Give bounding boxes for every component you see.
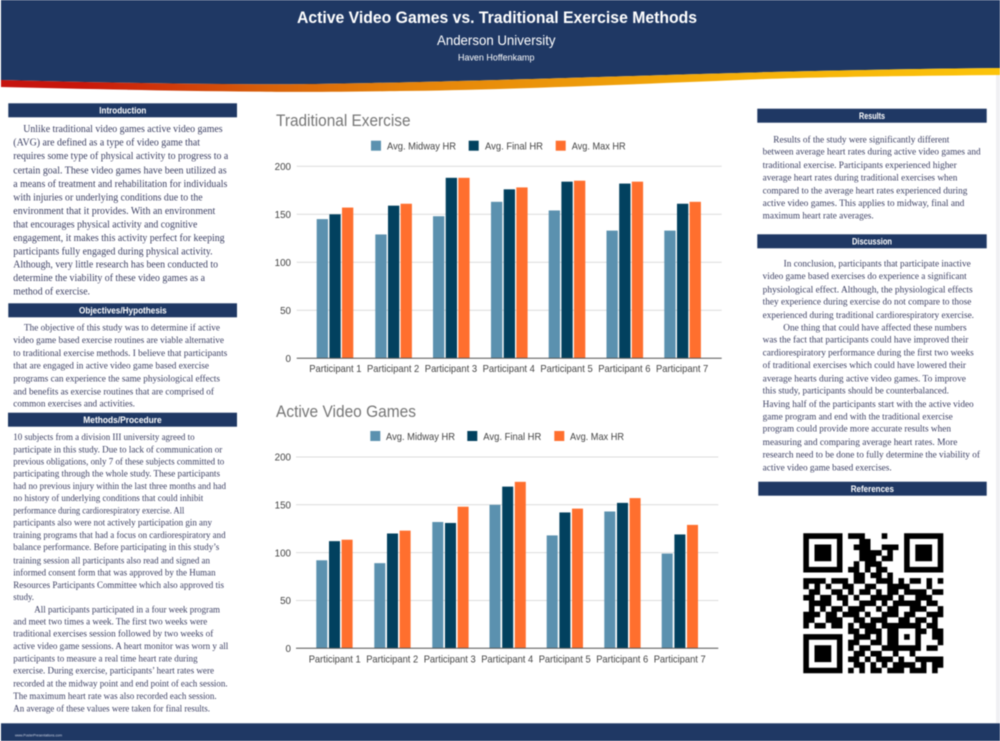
x axis labels: Participant 4 — [481, 653, 533, 665]
text: methods body: traditional exercises session followed by two weeks of — [13, 629, 213, 639]
text: methods body — [13, 432, 229, 713]
text: introduction body: (AVG) are defined as a type of video game that — [13, 138, 200, 149]
x axis labels: Participant 6 — [598, 363, 651, 375]
text: discussion body: video game based exercises do experience a significant — [763, 271, 967, 281]
panel: results — [757, 109, 987, 220]
heading: methods — [8, 413, 237, 427]
y axis labels — [275, 162, 292, 365]
text: results body: maximum heart rate averages. — [763, 210, 874, 220]
heading: introduction: Introduction — [99, 106, 146, 116]
wave stripe — [1, 68, 1000, 92]
bars — [316, 482, 698, 648]
text: discussion body: In conclusion, participants that participate inactive — [784, 259, 971, 269]
x axis labels: Participant 5 — [539, 653, 591, 665]
y axis labels: 200 — [275, 162, 292, 173]
heading: discussion: Discussion — [852, 236, 892, 246]
chart title: Active Video Games — [276, 403, 416, 421]
text: methods body: had no previous injury within the last three months and had — [13, 481, 226, 491]
text: methods body: study. — [13, 592, 34, 602]
panel: methods — [8, 413, 237, 713]
text: introduction body: requires some type of physical activity to progress to a — [13, 151, 229, 162]
heading: introduction — [8, 103, 237, 117]
text: discussion body: average hearts during active video games. To improve — [763, 373, 966, 383]
legend: Avg. Max HR — [570, 431, 624, 443]
y axis labels: 100 — [275, 258, 292, 269]
panel: discussion — [757, 234, 987, 473]
text: objectives body: common exercises and activities. — [13, 399, 135, 409]
text: discussion body: program could provide more accurate results when — [763, 424, 952, 434]
y axis labels: 200 — [275, 453, 292, 464]
text: objectives body: The objective of this study was to determine if active — [24, 323, 220, 333]
text: introduction body: determine the viability of these video games as a — [13, 273, 206, 284]
y axis labels — [275, 453, 292, 655]
x axis labels: Participant 2 — [367, 363, 419, 375]
university: Anderson University — [437, 32, 556, 48]
x axis labels: Participant 4 — [483, 363, 535, 375]
text: objectives body: and benefits as exercise routines that are comprised of — [13, 386, 214, 396]
heading: objectives: Objectives/Hypothesis — [79, 306, 167, 316]
panel: objectives — [8, 303, 237, 409]
y axis labels: 0 — [286, 354, 292, 365]
text: discussion body: One thing that could have affected these numbers — [783, 322, 967, 332]
text: methods body: participants also were not actively participation gin any — [13, 518, 212, 528]
text: results body: Results of the study were significantly different — [773, 134, 950, 144]
x axis labels: Participant 1 — [309, 653, 361, 665]
text: introduction body — [13, 124, 229, 298]
header banner — [1, 0, 1000, 92]
text: objectives body: to traditional exercise methods. I believe that participants — [13, 348, 228, 358]
footer text: www.PosterPresentations.com — [15, 732, 63, 738]
text: introduction body: Unlike traditional video games active video games — [23, 124, 223, 135]
text: methods body: and meet two times a week. The first two weeks were — [13, 617, 207, 627]
text: methods body: no history of underlying conditions that could inhibit — [13, 493, 204, 503]
text: methods body: performance during cardiorespiratory exercise. All — [13, 505, 185, 515]
y axis labels: 100 — [275, 548, 292, 559]
x axis labels: Participant 6 — [596, 653, 648, 665]
text: discussion body: active video game based exercises. — [763, 463, 892, 473]
text: discussion body: experienced during traditional cardiorespiratory exercise. — [763, 310, 974, 320]
panel: references — [758, 482, 987, 673]
text: results body: traditional exercise. Participants experienced higher — [763, 160, 957, 170]
text: introduction body: with injuries or underlying conditions due to the — [13, 193, 203, 204]
legend: Avg. Midway HR — [386, 431, 455, 443]
text: discussion body: cardiorespiratory performance during the first two weeks — [763, 348, 974, 358]
text: methods body: previous obligations, only 7 of these subjects committed to — [13, 457, 225, 467]
text: discussion body: research need to be done to fully determine the viability of — [763, 449, 980, 459]
text: results body: active video games. This applies to midway, final and — [763, 198, 965, 208]
text: introduction body: participants fully engaged during physical activity. — [13, 246, 213, 257]
text: methods body: recorded at the midway point and end point of each session. — [13, 679, 228, 689]
text: objectives body: programs can experience the same physiological effects — [13, 374, 220, 384]
heading: references: References — [851, 484, 894, 494]
text: methods body: participate in this study. Due to lack of communication or — [13, 444, 222, 454]
y axis labels: 150 — [275, 500, 292, 512]
text: discussion body: game program and end with the traditional exercise — [763, 411, 953, 421]
legend: Avg. Midway HR — [387, 140, 456, 152]
y axis labels: 150 — [275, 210, 292, 221]
text: discussion body — [763, 259, 980, 473]
legend — [370, 431, 624, 443]
heading: results: Results — [859, 111, 885, 121]
chart title: Traditional Exercise — [276, 112, 410, 130]
heading: discussion — [757, 234, 987, 248]
x axis labels — [309, 653, 706, 665]
text: objectives body: video game based exercise routines are viable alternative — [13, 335, 224, 345]
text: methods body: 10 subjects from a division III university agreed to — [13, 432, 195, 442]
heading: references — [758, 482, 987, 496]
text: methods body: participants to measure a real time heart rate during — [13, 653, 198, 663]
footer bar — [1, 723, 1000, 741]
legend: Avg. Final HR — [483, 431, 542, 443]
legend — [371, 140, 626, 152]
author: Haven Hoffenkamp — [458, 52, 534, 62]
title: Active Video Games vs. Traditional Exercise Methods — [297, 8, 697, 27]
x axis labels: Participant 3 — [424, 653, 476, 665]
text: introduction body: that encourages physical activity and cognitive — [13, 220, 198, 231]
chart: traditional exercise — [275, 112, 722, 375]
heading: objectives — [8, 303, 237, 317]
text: introduction body: environment that it provides. With an environment — [13, 206, 216, 217]
text: methods body: An average of these values were taken for final results. — [13, 703, 210, 713]
text: discussion body: they experience during exercise do not compare to those — [763, 297, 971, 307]
text: introduction body: Although, very little research has been conducted to — [13, 260, 218, 271]
text: methods body: Resources Participants Committee which also approved tis — [13, 580, 224, 590]
y axis labels: 50 — [280, 596, 292, 607]
panel: introduction — [8, 103, 237, 298]
icon: QR code — [803, 533, 943, 673]
text: discussion body: this study, participants should be counterbalanced. — [763, 386, 949, 396]
heading: methods: Methods/Procedure — [83, 415, 162, 425]
text: objectives body: that are engaged in active video game based exercise — [13, 361, 209, 371]
x axis labels: Participant 2 — [366, 653, 418, 665]
text: discussion body: was the fact that participants could have improved their — [763, 334, 968, 344]
text: methods body: All participants participated in a four week program — [34, 604, 220, 614]
text: introduction body: certain goal. These video games have been utilized as — [13, 166, 227, 177]
text: introduction body: engagement, it makes this activity perfect for keeping — [13, 233, 225, 244]
bars — [317, 178, 701, 358]
x axis labels — [309, 363, 708, 375]
legend: Avg. Final HR — [485, 140, 543, 152]
text: discussion body: of traditional exercises which could have lowered their — [763, 360, 966, 370]
x axis labels: Participant 7 — [656, 363, 708, 375]
text: methods body: participating through the whole study. These participants — [13, 469, 221, 479]
heading: results — [757, 109, 987, 123]
text: discussion body: physiological effect. Although, the physiological effects — [763, 284, 973, 294]
text: introduction body: a means of treatment and rehabilitation for individuals — [13, 179, 227, 190]
x axis labels: Participant 5 — [540, 363, 593, 375]
text: methods body: training programs that had a focus on cardiorespiratory and — [13, 530, 226, 540]
text: discussion body: Having half of the participants start with the active video — [763, 399, 974, 409]
text: methods body: informed consent form that was approved by the Human — [13, 568, 216, 578]
text: methods body: training session all participants also read and signed an — [13, 555, 210, 565]
text: methods body: exercise. During exercise, participants’ heart rates were — [13, 665, 214, 675]
text: results body: compared to the average heart rates experienced during — [763, 186, 968, 196]
text: introduction body: method of exercise. — [13, 287, 90, 298]
x axis labels: Participant 3 — [425, 363, 477, 375]
text: results body — [763, 134, 981, 220]
chart: active video games — [275, 403, 718, 665]
x axis labels: Participant 1 — [309, 363, 362, 375]
y axis labels: 0 — [286, 644, 292, 655]
text: methods body: The maximum heart rate was also recorded each session. — [13, 691, 217, 701]
legend: Avg. Max HR — [572, 140, 626, 152]
text: results body: between average heart rates during active video games and — [763, 147, 981, 157]
text: methods body: balance performance. Before participating in this study’s — [13, 542, 220, 552]
x axis labels: Participant 7 — [654, 653, 706, 665]
text: results body: average heart rates during traditional exercises when — [763, 172, 958, 182]
text: methods body: active video game sessions. A heart monitor was worn y all — [13, 641, 229, 651]
text: objectives body — [13, 323, 228, 409]
y axis labels: 50 — [280, 306, 292, 317]
text: discussion body: measuring and comparing average heart rates. More — [763, 437, 957, 447]
